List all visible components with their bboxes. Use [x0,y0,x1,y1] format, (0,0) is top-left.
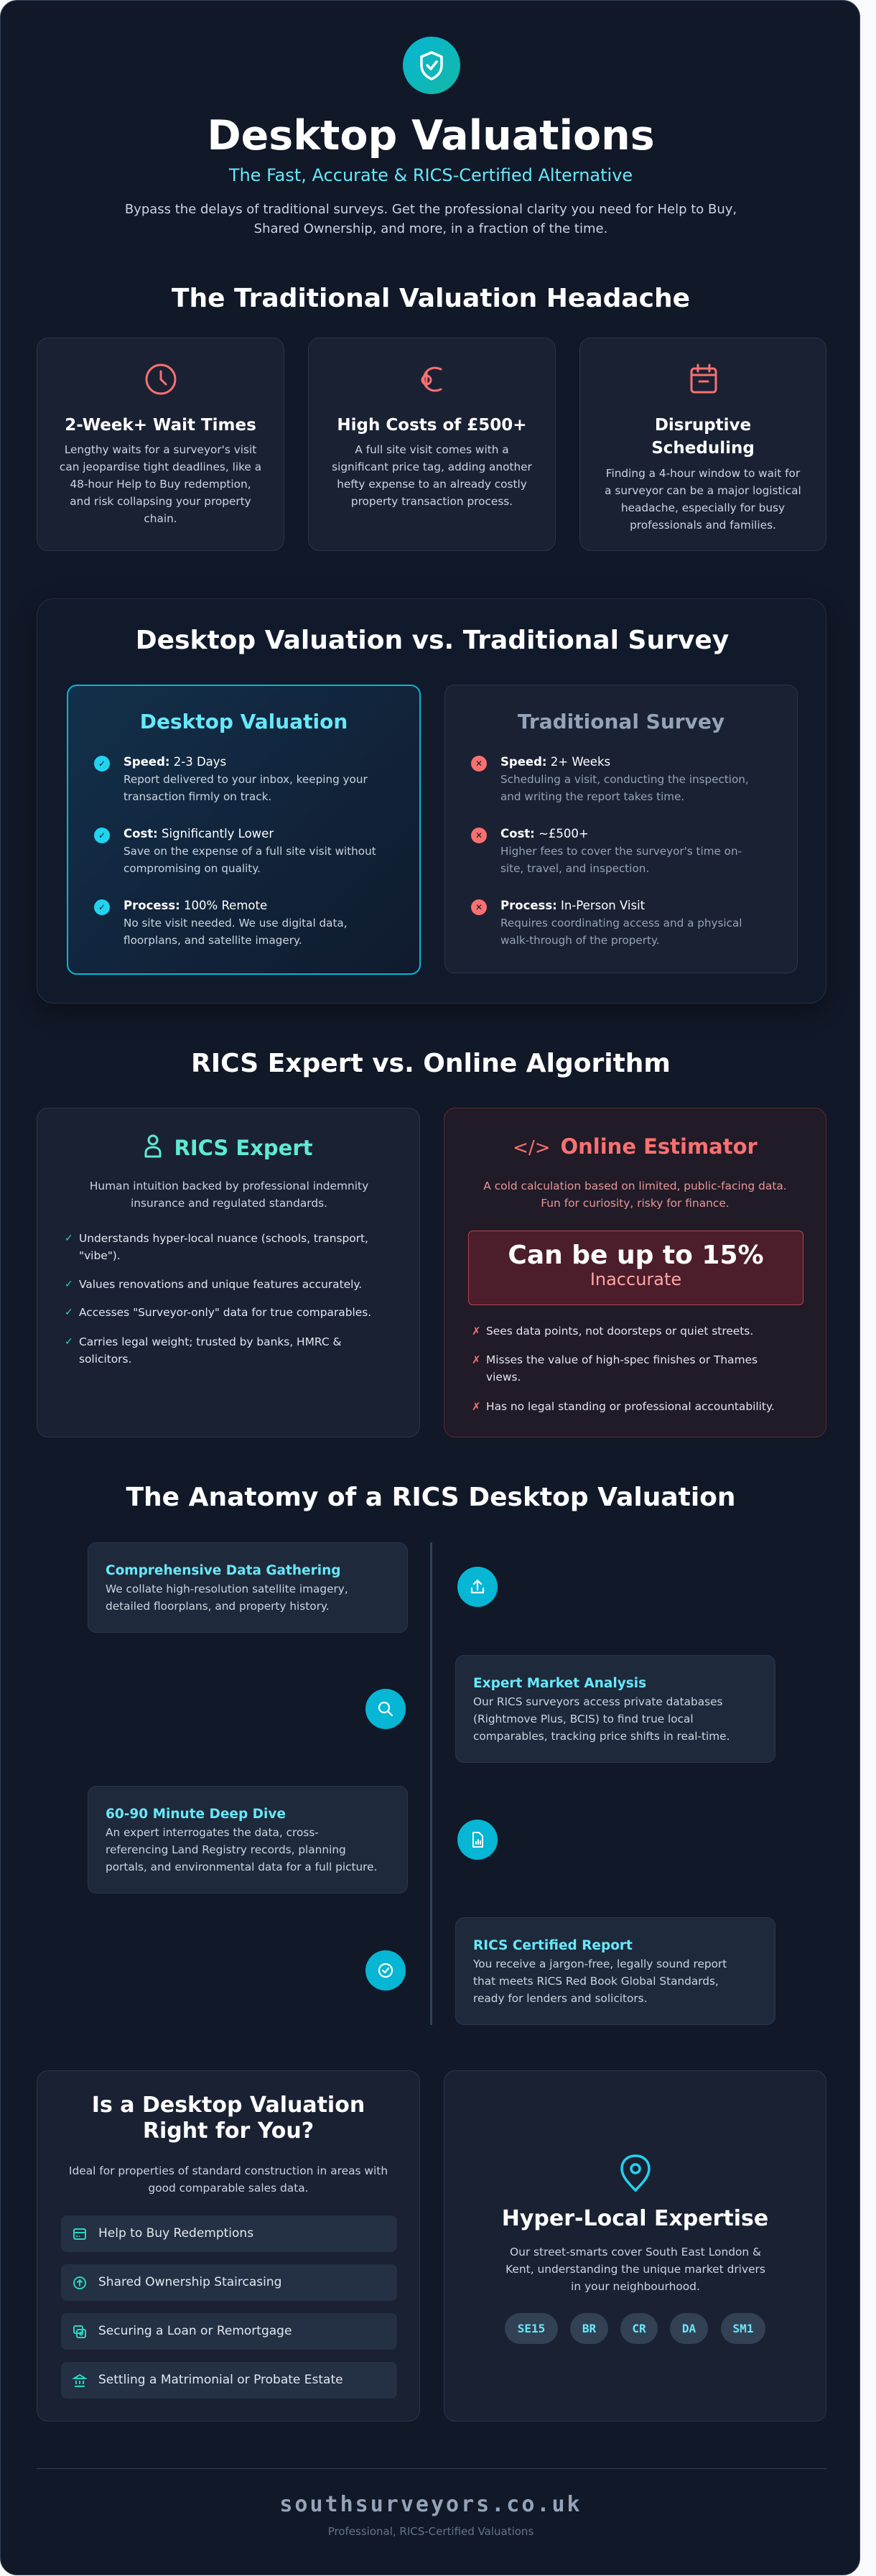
description: Human intuition backed by professional indemnity insurance and regulated standards. [90,1180,368,1210]
description: Ideal for properties of standard construction in areas with good comparable sales data. [69,2164,388,2195]
panel: scheduling [579,338,826,551]
step 2 card [455,1655,775,1763]
timeline [88,1542,775,2025]
item: speed: Report delivered to your inbox, keeping your [124,773,368,786]
panel: comparison [37,598,826,1004]
heading: Desktop Valuation vs. Traditional Survey [136,626,729,655]
item: cost: Save on the expense of a full site visit without [124,845,376,858]
postcode pills: DA [682,2322,696,2335]
panel: online estimator [444,1108,826,1437]
text: professionals and families. [630,519,776,532]
item: speed: Scheduling a visit, conducting the inspection, [500,773,749,786]
checklist: ✓ [65,1336,73,1348]
panel: is it right for you [37,2070,420,2422]
card: desktop valuation: ✓ [98,759,106,769]
list item: probate [61,2362,397,2399]
postcode pills: BR [582,2322,596,2335]
callout: 15% inaccurate: Inaccurate [590,1269,681,1289]
x list: Misses the value of high-spec finishes or Thames views. [486,1353,758,1384]
heading: Scheduling [651,439,755,458]
card: traditional survey [444,685,798,973]
checklist: ✓ [65,1279,73,1290]
checklist: ✓ [65,1233,73,1244]
step 1 card [88,1542,408,1633]
panel: RICS expert [37,1108,420,1437]
postcode pills [505,2313,765,2344]
description [505,2246,765,2293]
item: cost: Higher fees to cover the surveyor's time on- [500,845,742,858]
card title with person icon: RICS Expert [174,1136,313,1160]
text: Finding a 4-hour window to wait for [606,467,800,480]
item: speed: Speed: 2-3 Days [124,755,226,769]
item: process: floorplans, and satellite imagery. [124,934,302,947]
icon: upload [457,1567,498,1607]
description: Kent, understanding the unique market drivers [505,2263,765,2276]
heading: RICS Expert vs Online Algorithm: RICS Expert vs. Online Algorithm [191,1049,671,1078]
text: hefty expense to an already costly [337,478,527,491]
footer: domain: southsurveyors.co.uk [279,2492,582,2517]
heading: Is a Desktop Valuation [92,2093,365,2118]
card: desktop valuation [67,685,421,975]
list item: loan [61,2313,397,2350]
list item: help to buy [61,2215,397,2252]
item: speed [94,755,368,803]
heading: 2-Week+ Wait Times [65,416,256,435]
item: process [471,899,742,947]
step 1 card: detailed floorplans, and property history. [106,1600,330,1613]
card title: Desktop Valuation [140,710,348,733]
step 2 card: Expert Market Analysis [473,1676,646,1691]
heading: The Traditional Valuation Headache: The Traditional Valuation Headache [172,284,690,313]
text: 48-hour Help to Buy redemption, [70,478,251,491]
text: A full site visit comes with a [355,443,509,456]
description: in your neighbourhood. [571,2280,700,2293]
header icon: shield [403,37,460,94]
card: traditional survey: ✕ [475,759,483,769]
text: can jeopardise tight deadlines, like a [60,460,261,473]
x list: Has no legal standing or professional accountability. [486,1400,775,1413]
intro text [125,202,737,236]
heading: Disruptive [655,416,751,435]
postcode pills: SM1 [733,2322,753,2335]
footer: tagline: Professional, RICS-Certified Valuations [328,2525,533,2538]
item: cost [94,827,376,875]
x list: Sees data points, not doorsteps or quiet streets. [486,1325,753,1338]
card title with code icon: </> Online Estimator [513,1134,758,1159]
icon: document chart [457,1820,498,1860]
item: process [94,899,348,947]
text: a surveyor can be a major logistical [605,484,801,497]
card: desktop valuation: ✓ [98,902,106,912]
heading [651,416,755,458]
text: property transaction process. [351,495,513,508]
icon: check circle [365,1950,406,1991]
item: process: Process: 100% Remote [124,899,267,912]
x list: ✗ [472,1325,481,1338]
list item: probate: Settling a Matrimonial or Probate Estate [98,2373,343,2387]
checklist: Values renovations and unique features accurately. [79,1278,362,1291]
text [605,467,801,532]
text: Lengthy waits for a surveyor's visit [65,443,256,456]
list item: shared ownership: Shared Ownership Staircasing [98,2275,281,2289]
step 4 card: You receive a jargon-free, legally sound report [473,1958,727,1970]
panel: high costs [308,338,556,551]
description [483,1180,787,1210]
callout: 15% inaccurate [468,1231,803,1305]
heading: anatomy: The Anatomy of a RICS Desktop Valuation [126,1483,736,1512]
icon: clock [145,363,177,395]
item: speed: and writing the report takes time. [500,790,684,803]
step 1 card: Comprehensive Data Gathering [106,1563,340,1578]
heading [92,2093,365,2144]
step 4 card: RICS Certified Report [473,1938,633,1953]
list item: loan: Securing a Loan or Remortgage [98,2324,292,2338]
list item: shared ownership [61,2264,397,2301]
checklist: Carries legal weight; trusted by banks, HMRC & solicitors. [79,1335,341,1366]
callout: 15% inaccurate: Can be up to 15% [508,1241,764,1270]
icon: search [365,1689,406,1729]
item: speed: transaction firmly on track. [124,790,271,803]
step 3 card: 60-90 Minute Deep Dive [106,1807,286,1822]
step 4 card [455,1917,775,2025]
text: chain. [144,512,177,525]
step 3 card [88,1786,408,1894]
item: cost: Cost: ~£500+ [500,827,589,840]
description: Fun for curiosity, risky for finance. [541,1197,730,1210]
item: process: Requires coordinating access and a physical [500,917,742,930]
intro text: Shared Ownership, and more, in a fraction of the time. [254,221,607,236]
intro text: Bypass the delays of traditional surveys. Get the professional clarity you need for Help to Buy, [125,202,737,217]
step 1 card: We collate high-resolution satellite imagery, [106,1583,348,1595]
item: speed [471,755,749,803]
card: traditional survey: ✕ [475,830,483,840]
checklist [65,1232,371,1366]
postcode pills: CR [632,2322,646,2335]
description: A cold calculation based on limited, public-facing data. [483,1180,787,1192]
x list [472,1325,775,1413]
heading: High Costs of £500+ [337,416,527,435]
panel: wait times [37,338,284,551]
heading: Hyper-Local Expertise [502,2206,768,2231]
text [60,443,261,525]
step 4 card: ready for lenders and solicitors. [473,1992,647,2005]
text: and risk collapsing your property [70,495,251,508]
item: cost: Cost: Significantly Lower [124,827,274,840]
text: headache, especially for busy [621,501,785,514]
x list: ✗ [472,1353,481,1366]
icon: currency [421,366,442,392]
checklist: Understands hyper-local nuance (schools, transport, "vibe"). [79,1232,368,1262]
subtitle: The Fast, Accurate & RICS-Certified Alternative [229,165,633,185]
item: process: Process: In-Person Visit [500,899,645,912]
item: process: walk-through of the property. [500,934,660,947]
item: speed: Speed: 2+ Weeks [500,755,610,769]
list item: help to buy: Help to Buy Redemptions [98,2226,253,2241]
step 2 card: Our RICS surveyors access private databases [473,1695,722,1708]
heading: Right for You? [143,2118,314,2144]
icon: map pin [620,2154,651,2192]
item: cost: site, travel, and inspection. [500,862,649,875]
postcode pills: SE15 [518,2322,545,2335]
item: cost [471,827,742,875]
card title: Traditional Survey [518,710,724,733]
step 2 card: (Rightmove Plus, BCIS) to find true local [473,1713,694,1725]
step 2 card: comparables, tracking price shifts in real-time. [473,1730,730,1743]
step 3 card: referencing Land Registry records, planning [106,1843,346,1856]
title: Desktop Valuations [207,112,655,159]
step 4 card: that meets RICS Red Book Global Standards, [473,1975,719,1988]
text: significant price tag, adding another [332,460,532,473]
card: desktop valuation: ✓ [98,830,106,840]
item: cost: compromising on quality. [124,862,261,875]
panel: hyper-local [444,2070,826,2422]
x list: ✗ [472,1400,481,1413]
item: process: No site visit needed. We use digital data, [124,917,348,930]
card: traditional survey: ✕ [475,902,483,912]
checklist: ✓ [65,1307,73,1318]
icon: calendar [691,363,717,394]
step 3 card: An expert interrogates the data, cross- [106,1826,319,1839]
checklist: Accesses "Surveyor-only" data for true comparables. [79,1306,371,1319]
description: Our street-smarts cover South East London & [510,2246,761,2258]
text [332,443,532,508]
step 3 card: portals, and environmental data for a full picture. [106,1861,377,1873]
